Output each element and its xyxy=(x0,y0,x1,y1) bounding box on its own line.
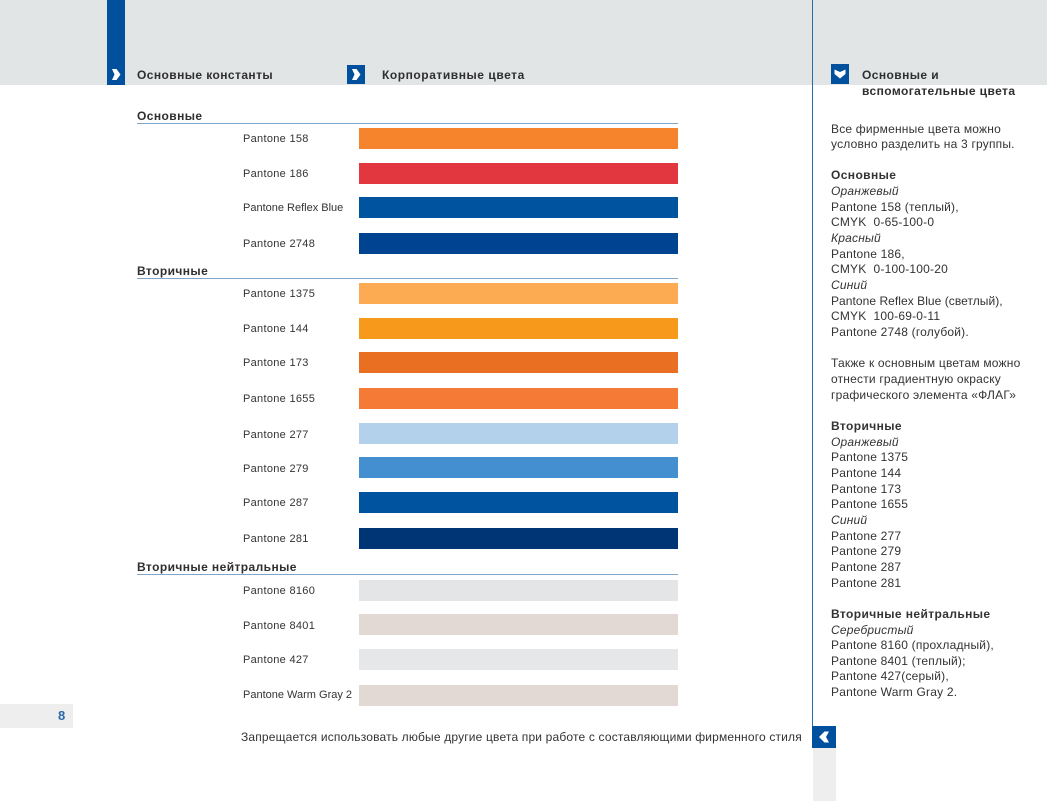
section rule xyxy=(137,278,678,279)
right column text: CMYK 0-100-100-20 xyxy=(831,262,948,276)
swatch row: Pantone 277: Pantone 277 xyxy=(243,429,309,441)
footer note: Запрещается использовать любые другие цвета при работе с составляющими фирменного стиля xyxy=(241,730,802,744)
right column text: Pantone 1655 xyxy=(831,497,908,511)
swatch row: Pantone 281: Pantone 281 xyxy=(243,533,309,545)
right header band xyxy=(813,0,1047,85)
swatch row: Pantone 279: Pantone 279 xyxy=(243,463,309,475)
heading: main and auxiliary colours: Основные и xyxy=(862,68,939,82)
right column text: Красный xyxy=(831,231,881,245)
right column text: Pantone 287 xyxy=(831,560,901,574)
right column text: Pantone 158 (теплый), xyxy=(831,200,959,214)
right column text: Pantone Reflex Blue (светлый), xyxy=(831,294,1003,308)
section heading: secondary neutrals: Вторичные нейтральные xyxy=(137,560,297,574)
header band xyxy=(0,0,812,85)
right column text: графического элемента «ФЛАГ» xyxy=(831,388,1016,402)
swatch row: Pantone 1655: Pantone 1655 xyxy=(243,393,315,405)
heading: corporate colours: Корпоративные цвета xyxy=(382,68,525,82)
right column text: Pantone 2748 (голубой). xyxy=(831,325,969,339)
page number: 8 xyxy=(58,708,65,723)
section rule xyxy=(137,574,678,575)
vertical page rule xyxy=(812,0,813,727)
swatch row: Pantone 1375: Pantone 1375 xyxy=(243,288,315,300)
right column text: Оранжевый xyxy=(831,435,899,449)
swatch row: Pantone Warm Gray 2: Pantone Warm Gray 2 xyxy=(243,689,352,701)
blue header tab with arrow xyxy=(107,0,125,85)
right column text: Синий xyxy=(831,513,867,527)
right column text: Pantone 281 xyxy=(831,576,901,590)
right column text: Синий xyxy=(831,278,867,292)
swatch row: Pantone Reflex Blue: Pantone Reflex Blue xyxy=(243,202,343,214)
right column text: Pantone 1375 xyxy=(831,450,908,464)
right column text: Pantone 277 xyxy=(831,529,901,543)
right column text: CMYK 0-65-100-0 xyxy=(831,215,934,229)
swatch row: Pantone 144: Pantone 144 xyxy=(243,323,309,335)
swatch row: Pantone 8160: Pantone 8160 xyxy=(243,585,315,597)
right column text: Вторичные xyxy=(831,419,902,433)
heading: main constants: Основные константы xyxy=(137,68,273,82)
right column text: Pantone 8401 (теплый); xyxy=(831,654,966,668)
right column text: Pantone 8160 (прохладный), xyxy=(831,638,994,652)
right column text: Также к основным цветам можно xyxy=(831,356,1020,370)
right column text: Pantone 144 xyxy=(831,466,901,480)
right column text: Pantone Warm Gray 2. xyxy=(831,685,957,699)
right column text: Серебристый xyxy=(831,622,914,636)
lower grey strip xyxy=(813,748,836,801)
icon: arrow down xyxy=(831,64,849,84)
swatch row: Pantone 158: Pantone 158 xyxy=(243,133,309,145)
swatch row: Pantone 2748: Pantone 2748 xyxy=(243,238,315,250)
right column text: Pantone 173 xyxy=(831,482,901,496)
right column text: Оранжевый xyxy=(831,184,899,198)
swatch row: Pantone 287: Pantone 287 xyxy=(243,497,309,509)
page number tab xyxy=(0,704,73,728)
right column text: Вторичные нейтральные xyxy=(831,607,990,621)
section heading: secondary: Вторичные xyxy=(137,264,208,278)
right column text: Pantone 427(серый), xyxy=(831,669,949,683)
right column text: отнести градиентную окраску xyxy=(831,372,1001,386)
swatch row: Pantone 173: Pantone 173 xyxy=(243,357,309,369)
right column text: CMYK 100-69-0-11 xyxy=(831,309,940,323)
heading: main and auxiliary colours xyxy=(862,68,1016,98)
right column text: условно разделить на 3 группы. xyxy=(831,137,1015,151)
icon: arrow right xyxy=(347,65,365,84)
right column text: Pantone 279 xyxy=(831,544,901,558)
swatch row: Pantone 186: Pantone 186 xyxy=(243,168,309,180)
swatch row: Pantone 8401: Pantone 8401 xyxy=(243,620,315,632)
heading: main and auxiliary colours: вспомогательные цвета xyxy=(862,84,1015,98)
section rule xyxy=(137,123,678,124)
section heading: main: Основные xyxy=(137,108,202,122)
right column text: Pantone 186, xyxy=(831,247,905,261)
right column text xyxy=(831,122,1020,699)
right column text: Все фирменные цвета можно xyxy=(831,122,1001,136)
back arrow tab xyxy=(812,726,836,748)
swatch row: Pantone 427: Pantone 427 xyxy=(243,654,309,666)
right column text: Основные xyxy=(831,168,896,182)
